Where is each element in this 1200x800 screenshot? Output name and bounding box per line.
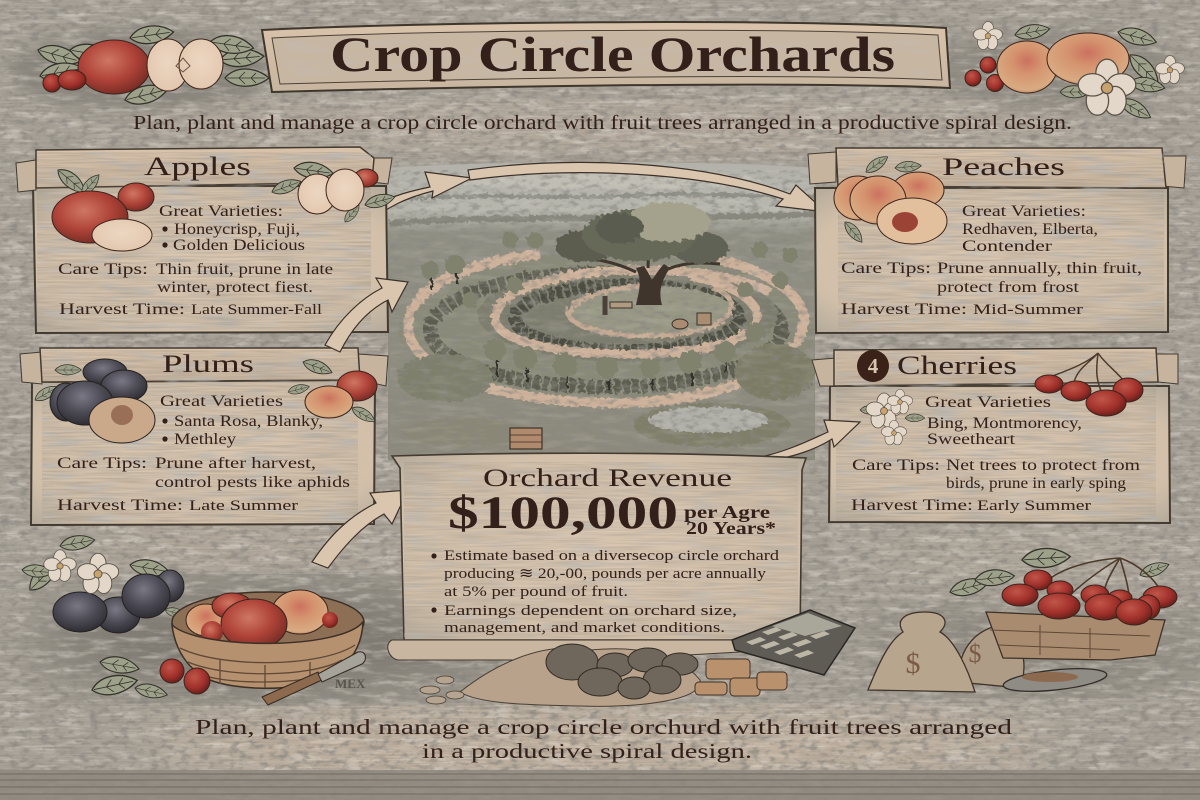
text: care and harvest: Prune after harvest, <box>155 455 316 472</box>
icon: knife <box>262 652 366 705</box>
text: care and harvest: Early Summer <box>977 498 1091 514</box>
rocks and pond <box>397 354 493 402</box>
icon: cherries and leaves <box>90 654 210 701</box>
text: care and harvest <box>841 260 1142 318</box>
large central tree <box>555 202 728 329</box>
text: varieties <box>962 203 1098 255</box>
icon: apple and peach <box>287 356 378 425</box>
heading: apples: Apples <box>144 152 251 181</box>
panel: orchard revenue scroll <box>388 453 806 660</box>
text: care and harvest: Late Summer <box>189 498 298 514</box>
subtitle: Plan, plant and manage a crop circle orchard with fruit trees arranged in a productive spiral design. <box>133 112 1072 134</box>
text: care and harvest: Harvest Time: <box>851 497 973 514</box>
arrow: apples to peaches (upper sweep) <box>362 162 826 224</box>
text: varieties: Great Varieties: <box>962 203 1086 220</box>
text: per acre: per Agre <box>684 502 770 522</box>
text: revenue notes: at 5% per pound of fruit. <box>444 584 628 600</box>
text: care and harvest: Harvest Time: <box>841 301 967 318</box>
text: varieties: Great Varieties: <box>159 203 283 220</box>
text: care and harvest: protect from frost <box>937 279 1080 296</box>
text: care and harvest <box>851 457 1141 514</box>
decoration: top-right peaches and blossoms <box>965 22 1184 123</box>
text: care and harvest: Net trees to protect from <box>946 457 1141 474</box>
text: varieties: Sweetheart <box>927 431 1016 448</box>
panel: title banner <box>262 22 950 92</box>
text: varieties: Honeycrisp, Fuji, <box>174 221 300 238</box>
badge: number 4 <box>857 350 889 382</box>
arrow: to apples-side scene <box>325 278 408 352</box>
text: varieties <box>159 203 305 254</box>
text: varieties: Golden Delicious <box>173 237 305 254</box>
icon: cut apple <box>270 160 396 225</box>
text: revenue notes: management, and market conditions. <box>444 620 725 636</box>
icon: cherries <box>1035 353 1143 416</box>
icon: money bags <box>868 612 1024 692</box>
spiral path <box>408 254 804 403</box>
text: care and harvest: Mid-Summer <box>973 302 1083 318</box>
icon: knife: MEX <box>335 676 366 691</box>
closing text: in a productive spiral design. <box>422 739 752 763</box>
text: care and harvest: Late Summer-Fall <box>191 302 322 318</box>
closing text: Plan, plant and manage a crop circle orchurd with fruit trees arranged <box>195 715 1012 739</box>
icon: soil and stones <box>420 644 700 706</box>
decoration: top-left apples <box>36 23 269 108</box>
icon: cherry basket <box>948 547 1177 660</box>
text: care and harvest <box>58 261 333 318</box>
text: care and harvest <box>57 455 350 514</box>
title: Crop Circle Orchards <box>330 26 895 82</box>
text: varieties: Santa Rosa, Blanky, <box>174 413 323 430</box>
icon: apples <box>52 164 154 251</box>
text: care and harvest: Harvest Time: <box>57 497 183 514</box>
text: care and harvest: Care Tips: <box>841 260 931 277</box>
icon: blossoms <box>860 389 925 445</box>
text: revenue notes: producing ≋ 20,-00, pounds per acre annually <box>444 566 767 582</box>
panel: apples <box>16 147 396 333</box>
text: care and harvest: Care Tips: <box>852 457 940 474</box>
text: per acre <box>684 502 776 538</box>
text: care and harvest: control pests like aphids <box>155 474 350 491</box>
decoration: plums and blossoms bottom-left <box>21 533 187 633</box>
text: varieties: Redhaven, Elberta, <box>962 221 1098 238</box>
text: varieties <box>925 394 1082 448</box>
central orchard spiral scene <box>388 162 815 460</box>
panel: plums <box>20 348 388 525</box>
figure: revenue amount: $100,000 <box>448 487 678 539</box>
wooden crate <box>510 428 542 449</box>
spiral ground rings <box>398 252 814 408</box>
panel: cherries <box>812 348 1178 523</box>
heading: peaches: Peaches <box>942 154 1065 181</box>
text: care and harvest: Care Tips: <box>58 261 148 278</box>
arrow: plums to revenue <box>312 490 408 568</box>
text: varieties: Contender <box>962 238 1053 255</box>
text: revenue notes <box>431 548 780 636</box>
text: care and harvest: birds, prune in early sping <box>946 475 1126 492</box>
badge: number 4: 4 <box>868 354 879 378</box>
text: per acre: 20 Years* <box>686 518 776 538</box>
icon: money bags: $ <box>968 639 982 668</box>
text: revenue notes: Estimate based on a diversecop circle orchard <box>444 548 780 564</box>
icon: calculator <box>732 610 855 675</box>
icon: dish of nuts <box>1002 665 1108 695</box>
scene texture <box>390 170 814 458</box>
icon: money bags: $ <box>906 647 920 680</box>
icon: peaches <box>834 152 947 245</box>
heading: plums: Plums <box>162 351 254 378</box>
small orchard trees <box>421 232 798 390</box>
closing text <box>195 715 1012 763</box>
heading: revenue: Orchard Revenue <box>483 465 732 492</box>
icon: plums <box>32 359 155 443</box>
text: varieties: Great Varieties <box>925 394 1051 411</box>
text: varieties <box>160 393 323 448</box>
text: varieties: Methley <box>174 431 236 448</box>
icon: coin stacks <box>695 659 787 696</box>
arrow: revenue to cherries <box>765 420 860 460</box>
panel: peaches <box>808 148 1186 333</box>
text: care and harvest: Prune annually, thin fruit, <box>937 260 1142 277</box>
text: care and harvest: winter, protect fiest. <box>157 279 313 296</box>
icon: apple basket <box>172 590 364 688</box>
text: varieties: Great Varieties <box>160 393 283 410</box>
text: varieties: Bing, Montmorency, <box>927 415 1082 432</box>
text: care and harvest: Harvest Time: <box>59 301 185 318</box>
text: revenue notes: Earnings dependent on orchard size, <box>444 603 737 619</box>
text: care and harvest: Thin fruit, prune in late <box>156 261 333 278</box>
heading: cherries: Cherries <box>897 351 1017 380</box>
text: care and harvest: Care Tips: <box>57 455 147 472</box>
